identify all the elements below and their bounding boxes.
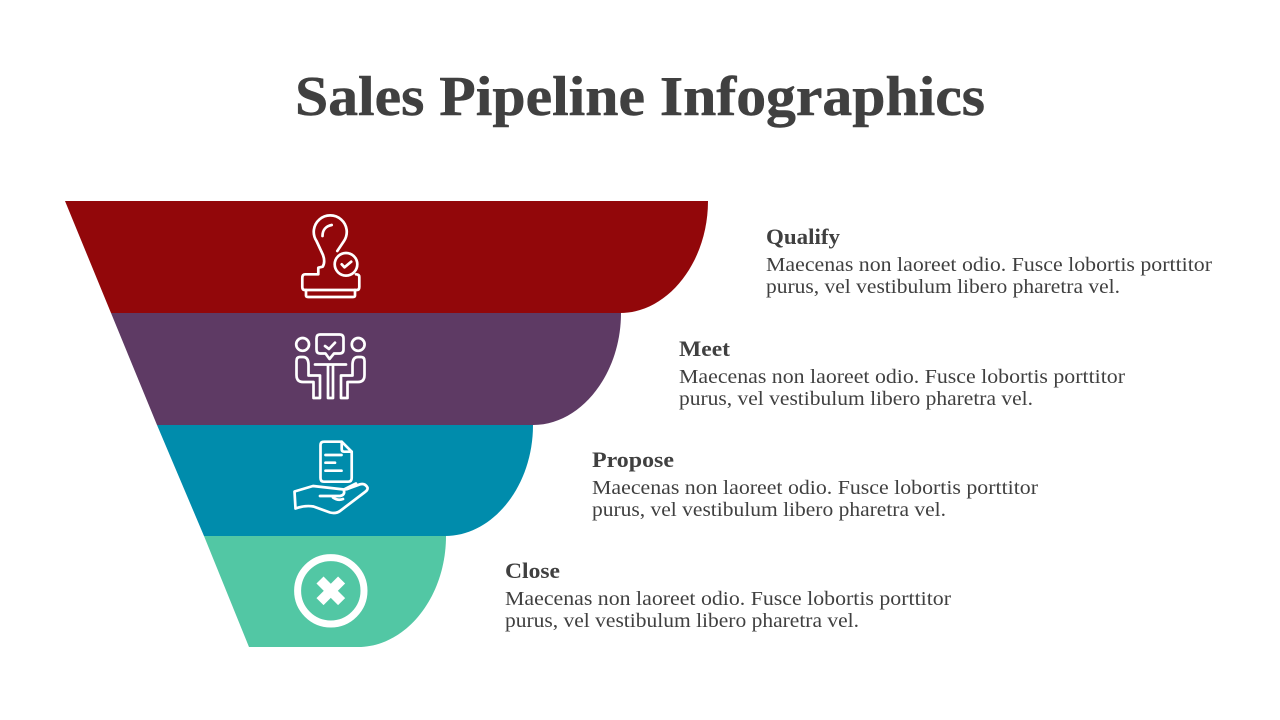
funnel band: Qualify (65, 201, 708, 313)
title: Sales Pipeline Infographics (295, 66, 985, 128)
funnel band: Close (204, 536, 446, 647)
funnel stage: Qualify (65, 201, 708, 313)
text block: Propose: Maecenas non laoreet odio. Fusce lobortis porttitor (592, 477, 1038, 499)
text block: Meet: Meet (679, 336, 731, 361)
text block: Close (505, 558, 951, 632)
text block: Close: Maecenas non laoreet odio. Fusce lobortis porttitor (505, 588, 951, 610)
icon: stamp with check (302, 215, 359, 297)
text block: Qualify: Maecenas non laoreet odio. Fusce lobortis porttitor (766, 254, 1212, 276)
funnel band: Propose (157, 425, 533, 536)
text block: Qualify: purus, vel vestibulum libero pharetra vel. (766, 276, 1120, 298)
text block: Close: purus, vel vestibulum libero pharetra vel. (505, 610, 859, 632)
funnel band: Meet (111, 313, 621, 425)
icon: meeting (296, 334, 365, 398)
text block: Close: Close (505, 558, 560, 583)
text block: Meet: Maecenas non laoreet odio. Fusce lobortis porttitor (679, 366, 1125, 388)
text block: Propose: Propose (592, 447, 674, 472)
icon: document on open hand (294, 442, 368, 513)
text block: Meet (679, 336, 1125, 410)
funnel stage: Propose (157, 425, 533, 536)
text block: Propose: purus, vel vestibulum libero pharetra vel. (592, 499, 946, 521)
text block: Qualify: Qualify (766, 224, 840, 249)
icon: circled cross (298, 558, 364, 624)
text block: Qualify (766, 224, 1212, 298)
text block: Meet: purus, vel vestibulum libero pharetra vel. (679, 388, 1033, 410)
funnel stage: Close (204, 536, 446, 647)
text block: Propose (592, 447, 1038, 521)
funnel stage: Meet (111, 313, 621, 425)
